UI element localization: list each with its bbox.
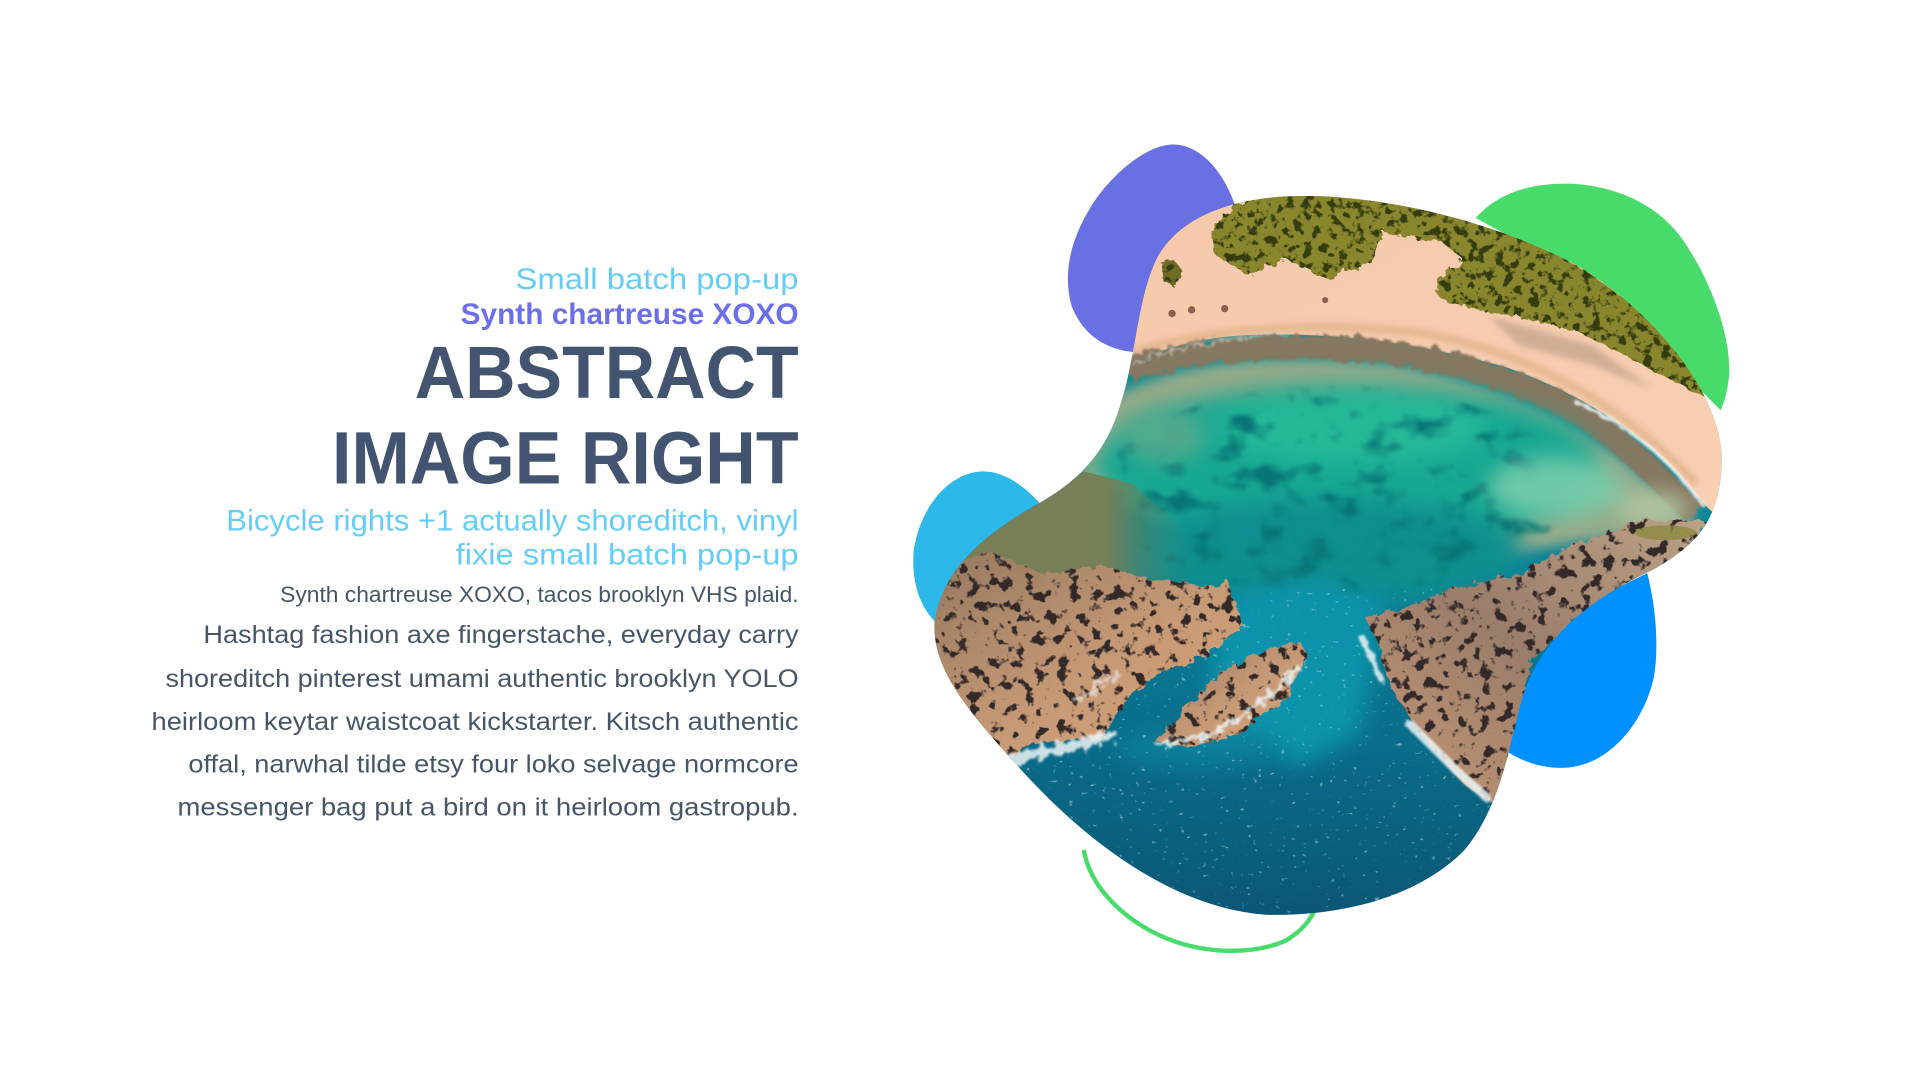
- subtitle: [226, 504, 799, 571]
- photo: small palm on sand: [1161, 260, 1183, 287]
- photo: white sea specks: [1026, 588, 1490, 913]
- subtitle: Bicycle rights +1 actually shoreditch, vinyl: [226, 504, 799, 537]
- abstract image composition: [906, 145, 1739, 951]
- outline blob: green: [1084, 850, 1318, 951]
- photo: light shallows: [1121, 408, 1690, 523]
- eyebrow: synth chartreuse: Synth chartreuse XOXO: [461, 298, 799, 331]
- photo blob: aerial beach and lagoon: [906, 184, 1739, 931]
- title: [332, 331, 799, 500]
- blob: bright blue: [1504, 573, 1656, 768]
- photo: umbrellas: [1168, 297, 1328, 317]
- title: ABSTRACT: [415, 331, 799, 414]
- photo: shallow shelf: [1078, 359, 1702, 563]
- photo: bright channel water: [1114, 582, 1384, 767]
- photo: palm shadows: [1488, 316, 1653, 389]
- photo: left rock: [925, 551, 1242, 765]
- subtitle: fixie small batch pop-up: [456, 538, 799, 571]
- photo: reef band: [1129, 347, 1696, 514]
- photo: turquoise lagoon: [1096, 385, 1598, 603]
- blob: green: [1476, 184, 1729, 410]
- body paragraph: Hashtag fashion axe fingerstache, everyday carry: [203, 621, 799, 649]
- lead sentence: Synth chartreuse XOXO, tacos brooklyn VHS plaid.: [280, 582, 799, 607]
- photo: grass on right rock: [1635, 525, 1696, 540]
- photo: right rock: [1366, 520, 1708, 808]
- blob: cyan: [913, 471, 1041, 627]
- photo: deep water: [906, 184, 1739, 931]
- body paragraph: messenger bag put a bird on it heirloom gastropub.: [177, 794, 799, 822]
- photo: trees: [1211, 196, 1705, 397]
- photo: island rock: [1154, 639, 1308, 747]
- photo: mottled reef: [1102, 386, 1568, 594]
- photo: wet sand: [1133, 327, 1696, 484]
- photo: brown reef flat: [934, 472, 1179, 623]
- photo: sand: [1130, 196, 1722, 512]
- body paragraph: heirloom keytar waistcoat kickstarter. Kitsch authentic: [152, 708, 799, 736]
- text column: [152, 263, 799, 822]
- blob: purple: [1068, 145, 1237, 353]
- body paragraph: shoreditch pinterest umami authentic brooklyn YOLO: [166, 665, 799, 693]
- body paragraph: [152, 621, 799, 822]
- photo: white surf: [994, 333, 1702, 799]
- body paragraph: offal, narwhal tilde etsy four loko selvage normcore: [188, 751, 799, 779]
- eyebrow: small batch: Small batch pop-up: [515, 263, 799, 296]
- title: IMAGE RIGHT: [332, 417, 799, 500]
